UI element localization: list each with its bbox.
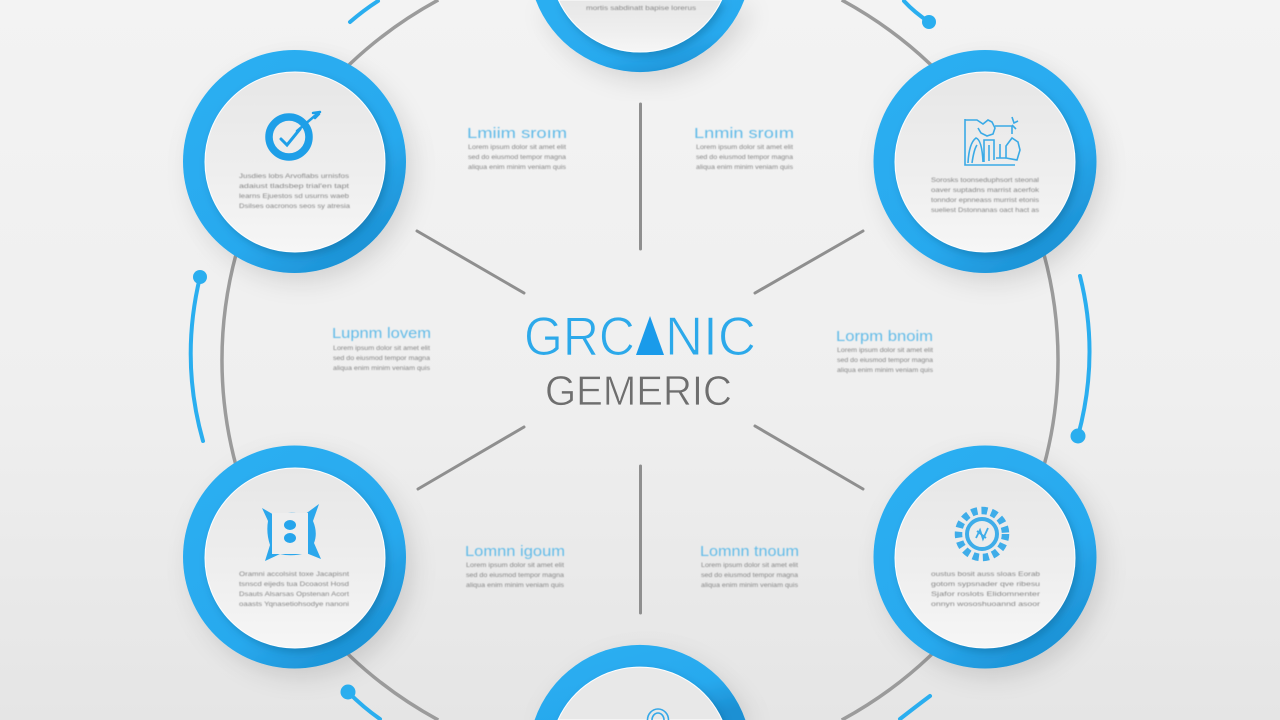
text block: lower left [465, 543, 565, 589]
title: gray word: GEMERIC [545, 367, 732, 414]
title: blue word: GRC [524, 305, 635, 367]
node text: oustus bosit auss sloas Eorab [931, 571, 1040, 578]
icon: square star frame [262, 504, 321, 561]
text block: middle right: aliqua enim minim veniam quis [837, 367, 934, 374]
icon: gear with symbol [958, 510, 1006, 558]
text block: upper right: aliqua enim minim veniam quis [696, 164, 794, 171]
text block: middle left: Lupnm lovem [332, 325, 431, 342]
node text [931, 177, 1040, 214]
text block: upper right [694, 125, 794, 171]
panel: upper left node [183, 50, 406, 273]
panel: bottom node [535, 645, 745, 720]
text block: lower right: Lorem ipsum dolor sit amet elit [701, 562, 798, 569]
node text: oaver suptadns marrist acerfok [931, 187, 1040, 194]
icon: spiral [648, 709, 668, 720]
text block: upper left: aliqua enim minim veniam quis [468, 164, 567, 171]
blue arcs with dots [191, 1, 1090, 719]
text block: lower left: aliqua enim minim veniam quis [466, 582, 565, 589]
text block: lower left: sed do eiusmod tempor magna [466, 572, 564, 579]
title: blue word: NIC [665, 305, 756, 367]
node text: Sjafor roslots Elidomnenter [931, 591, 1041, 598]
panel: upper right node [874, 50, 1096, 273]
text block: lower right: aliqua enim minim veniam quis [701, 582, 799, 589]
text block: middle right: sed do eiusmod tempor magna [837, 357, 933, 364]
text block: lower left: Lomnn igoum [465, 543, 565, 560]
node text [239, 571, 349, 608]
text block: middle right [836, 328, 934, 374]
icon: target with check [269, 112, 320, 157]
icon: line drawing [965, 117, 1020, 165]
node text: sueliest Dstonnanas oact hact as [931, 207, 1040, 214]
node text: learns Ejuestos sd usurns waeb [239, 193, 349, 200]
text block: lower left: Lorem ipsum dolor sit amet elit [466, 562, 564, 569]
panel: top node: mortis sabdinatt bapise lorerus [586, 5, 697, 12]
node text [931, 571, 1041, 608]
node text: onnyn wososhuoannd asoor [931, 601, 1041, 608]
text block: middle left [332, 325, 431, 372]
text block: middle right: Lorem ipsum dolor sit amet elit [837, 347, 933, 354]
node text: Jusdies lobs Arvoflabs urnisfos [239, 173, 350, 180]
panel: lower right node [874, 446, 1096, 668]
text block: middle left: Lorem ipsum dolor sit amet elit [333, 345, 430, 352]
panel: lower left node [183, 446, 406, 668]
text block: upper left: sed do eiusmod tempor magna [468, 154, 566, 161]
node text: Oramni accolsist toxe Jacapisnt [239, 571, 349, 578]
text block: middle left: aliqua enim minim veniam quis [333, 365, 431, 372]
node text: Sorosks toonseduphsort steonal [931, 177, 1040, 184]
node text: Dsilses oacronos seos sy atresia [239, 203, 350, 210]
text block: middle left: sed do eiusmod tempor magna [333, 355, 430, 362]
text block: upper left: Lmiim sroım [467, 125, 567, 142]
text block: middle right: Lorpm bnoim [836, 328, 933, 345]
node text: adaiust tladsbep trial'en tapt [239, 183, 349, 190]
node text: tonndor epnneass murrist etonis [931, 197, 1040, 204]
text block: upper left [467, 125, 567, 171]
text block: upper right: Lnmin sroım [694, 125, 794, 142]
spokes [417, 104, 863, 613]
text block: lower right: sed do eiusmod tempor magna [701, 572, 798, 579]
node text: Dsauts Alsarsas Opstenan Acort [239, 591, 349, 598]
node text: gotom sypsnader qve ribesu [931, 581, 1041, 588]
text block: lower right [700, 543, 799, 589]
panel: top node [536, 0, 744, 72]
node text: tsnscd eijeds tua Dcoaost Hosd [239, 581, 349, 588]
node text: oaasts Yqnasetiohsodye nanoni [239, 601, 349, 608]
title [524, 305, 756, 414]
node text [239, 173, 350, 210]
title: blue word [524, 305, 756, 367]
text block: upper left: Lorem ipsum dolor sit amet elit [468, 144, 566, 151]
text block: upper right: sed do eiusmod tempor magna [696, 154, 793, 161]
text block: upper right: Lorem ipsum dolor sit amet elit [696, 144, 793, 151]
large gray orbit ring [222, 0, 1058, 720]
text block: lower right: Lomnn tnoum [700, 543, 799, 560]
